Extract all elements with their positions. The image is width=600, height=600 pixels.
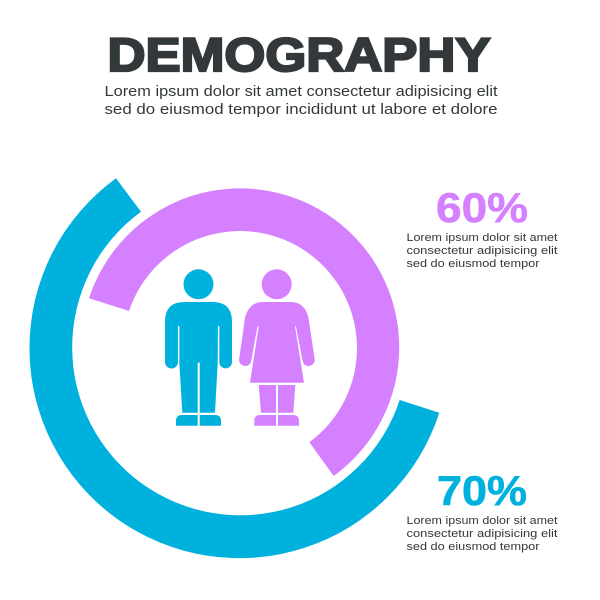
intro text: Lorem ipsum dolor sit amet consectetur adipisicing elit — [104, 84, 498, 100]
blue ring segment: 70% — [29, 178, 439, 558]
70% description: consectetur adipisicing elit — [406, 528, 558, 540]
70% description: sed do eiusmod tempor — [406, 541, 540, 553]
70% description: Lorem ipsum dolor sit amet — [406, 515, 558, 527]
stat: 70% — [406, 467, 558, 553]
intro text: sed do eiusmod tempor incididunt ut labore et dolore — [104, 102, 498, 118]
icon: man — [165, 269, 232, 426]
60% description — [406, 232, 558, 270]
title: DEMOGRAPHY — [108, 28, 490, 81]
60% description: consectetur adipisicing elit — [406, 245, 558, 257]
70% value: 70% — [437, 467, 527, 514]
icon: woman — [239, 269, 315, 426]
purple ring segment: 60% — [89, 188, 399, 476]
70% description — [406, 515, 558, 553]
intro text — [104, 84, 498, 118]
60% value: 60% — [436, 184, 528, 231]
stat: 60% — [406, 184, 558, 270]
60% description: sed do eiusmod tempor — [406, 258, 540, 270]
60% description: Lorem ipsum dolor sit amet — [406, 232, 558, 244]
